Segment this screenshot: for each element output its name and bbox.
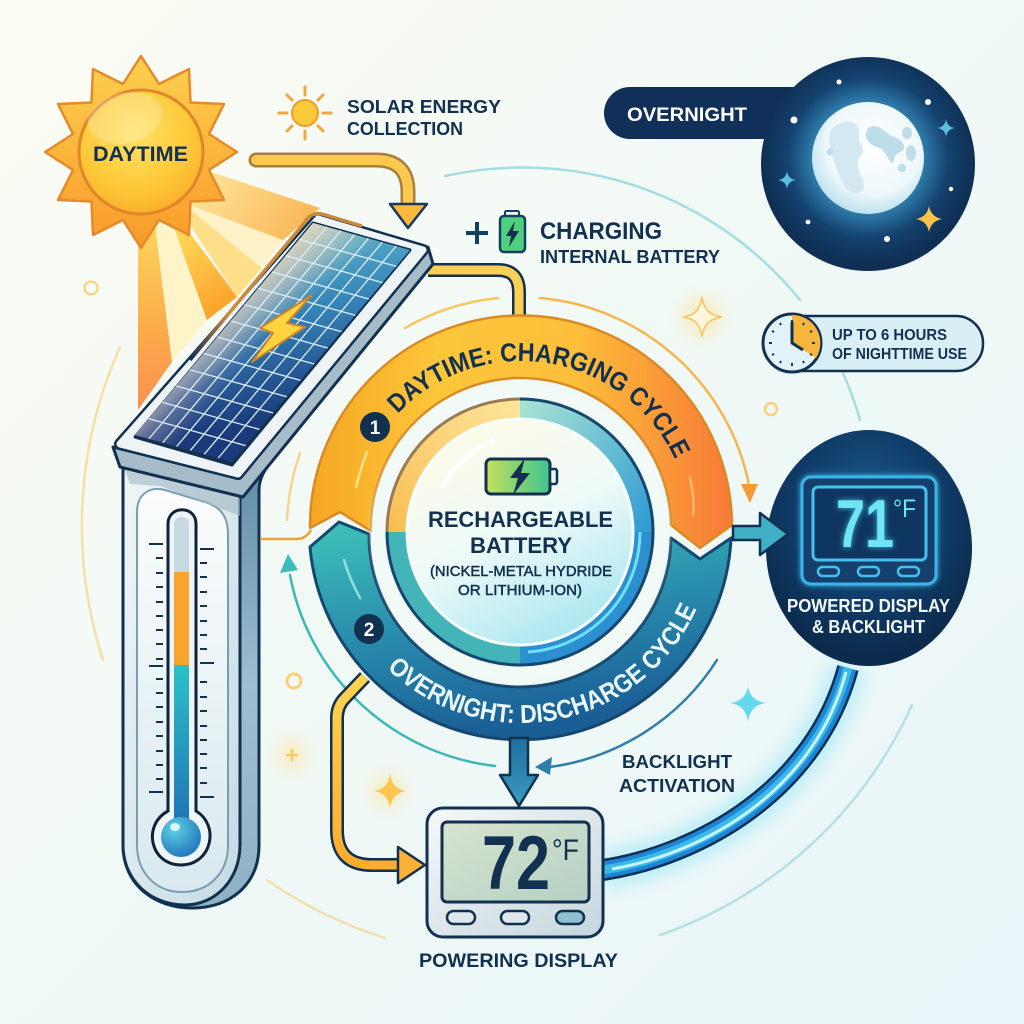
arrow: charging orbit — [540, 298, 758, 503]
label: rechargeable battery — [428, 507, 613, 599]
icon: plus — [466, 222, 488, 244]
panel cell grid — [135, 223, 410, 462]
label: solar energy collection: COLLECTION — [347, 119, 463, 139]
curved label: overnight discharge cycle: OVERNIGHT: DISCHARGE CYCLE — [390, 602, 696, 724]
icon: thermostat — [427, 808, 603, 937]
ring: daytime charging band — [308, 314, 734, 550]
icon: sun with Daytime label — [45, 56, 237, 248]
icon: thermostat: °F — [552, 834, 579, 867]
arrow: ring to powered display — [733, 513, 788, 555]
label: backlight activation — [619, 752, 735, 796]
sun rays — [138, 170, 320, 410]
label: powered display and backlight: POWERED DISPLAY — [787, 596, 950, 616]
central battery disc — [372, 385, 668, 681]
icon: thermostat: 72 — [482, 821, 550, 906]
icon: small battery — [500, 211, 525, 252]
callout: nighttime use: UP TO 6 HOURS — [832, 327, 947, 344]
panel: powered display and backlight — [766, 430, 972, 666]
wire: ring to thermostat — [337, 677, 425, 883]
icon: battery — [486, 458, 557, 495]
arrow: solar collection — [256, 160, 427, 228]
icon: moon — [812, 102, 924, 214]
label: charging internal battery — [540, 218, 720, 267]
thermometer housing — [123, 460, 272, 908]
wire: ring to thermometer — [260, 530, 311, 539]
decorative orbit arcs — [82, 168, 912, 938]
icon: small sun — [279, 87, 331, 139]
callout: nighttime use — [763, 314, 983, 372]
label: rechargeable battery: BATTERY — [470, 533, 572, 558]
label: backlight activation: BACKLIGHT — [622, 752, 732, 772]
label: rechargeable battery: (NICKEL-METAL HYDRIDE — [430, 563, 612, 580]
label: powered display and backlight — [787, 596, 950, 637]
thermometer gauge — [149, 510, 214, 865]
badge 1 — [360, 412, 390, 442]
arrow: ring to thermostat — [500, 738, 538, 806]
icon: glowing thermostat: °F — [893, 495, 916, 523]
badge 2: 2 — [364, 620, 374, 641]
stars — [778, 80, 955, 242]
label: solar energy collection: SOLAR ENERGY — [347, 97, 501, 117]
ring: overnight discharge band — [308, 520, 732, 741]
arrow: backlight activation orbit — [535, 660, 717, 775]
backlight tube — [603, 668, 848, 870]
label: overnight: OVERNIGHT — [627, 105, 747, 126]
panel: overnight moon — [604, 57, 975, 271]
icon: clock — [763, 314, 821, 372]
icon: panel bolt — [252, 295, 312, 362]
label: backlight activation: ACTIVATION — [619, 776, 735, 796]
curved label: daytime charging cycle: DAYTIME: CHARGING CYCLE — [386, 343, 690, 458]
badge 2 — [354, 614, 384, 644]
callout: nighttime use: OF NIGHTTIME USE — [832, 346, 967, 363]
wire: panel to ring — [428, 270, 519, 345]
solar panel — [113, 214, 433, 497]
arrow: discharge orbit — [280, 554, 495, 766]
sparkles and rings — [84, 282, 777, 809]
label: charging internal battery: INTERNAL BATTERY — [540, 247, 720, 267]
icon: sun with Daytime label: DAYTIME — [93, 143, 188, 166]
badge 1: 1 — [370, 418, 381, 439]
label: rechargeable battery: OR LITHIUM-ION) — [458, 582, 582, 599]
label: solar energy collection — [347, 97, 501, 139]
label: powering display: POWERING DISPLAY — [419, 951, 618, 972]
label: rechargeable battery: RECHARGEABLE — [428, 507, 613, 532]
icon: glowing thermostat: 71 — [836, 486, 894, 562]
label: charging internal battery: CHARGING — [540, 218, 662, 245]
icon: glowing thermostat — [802, 477, 936, 584]
label: powered display and backlight: & BACKLIGHT — [812, 617, 925, 637]
